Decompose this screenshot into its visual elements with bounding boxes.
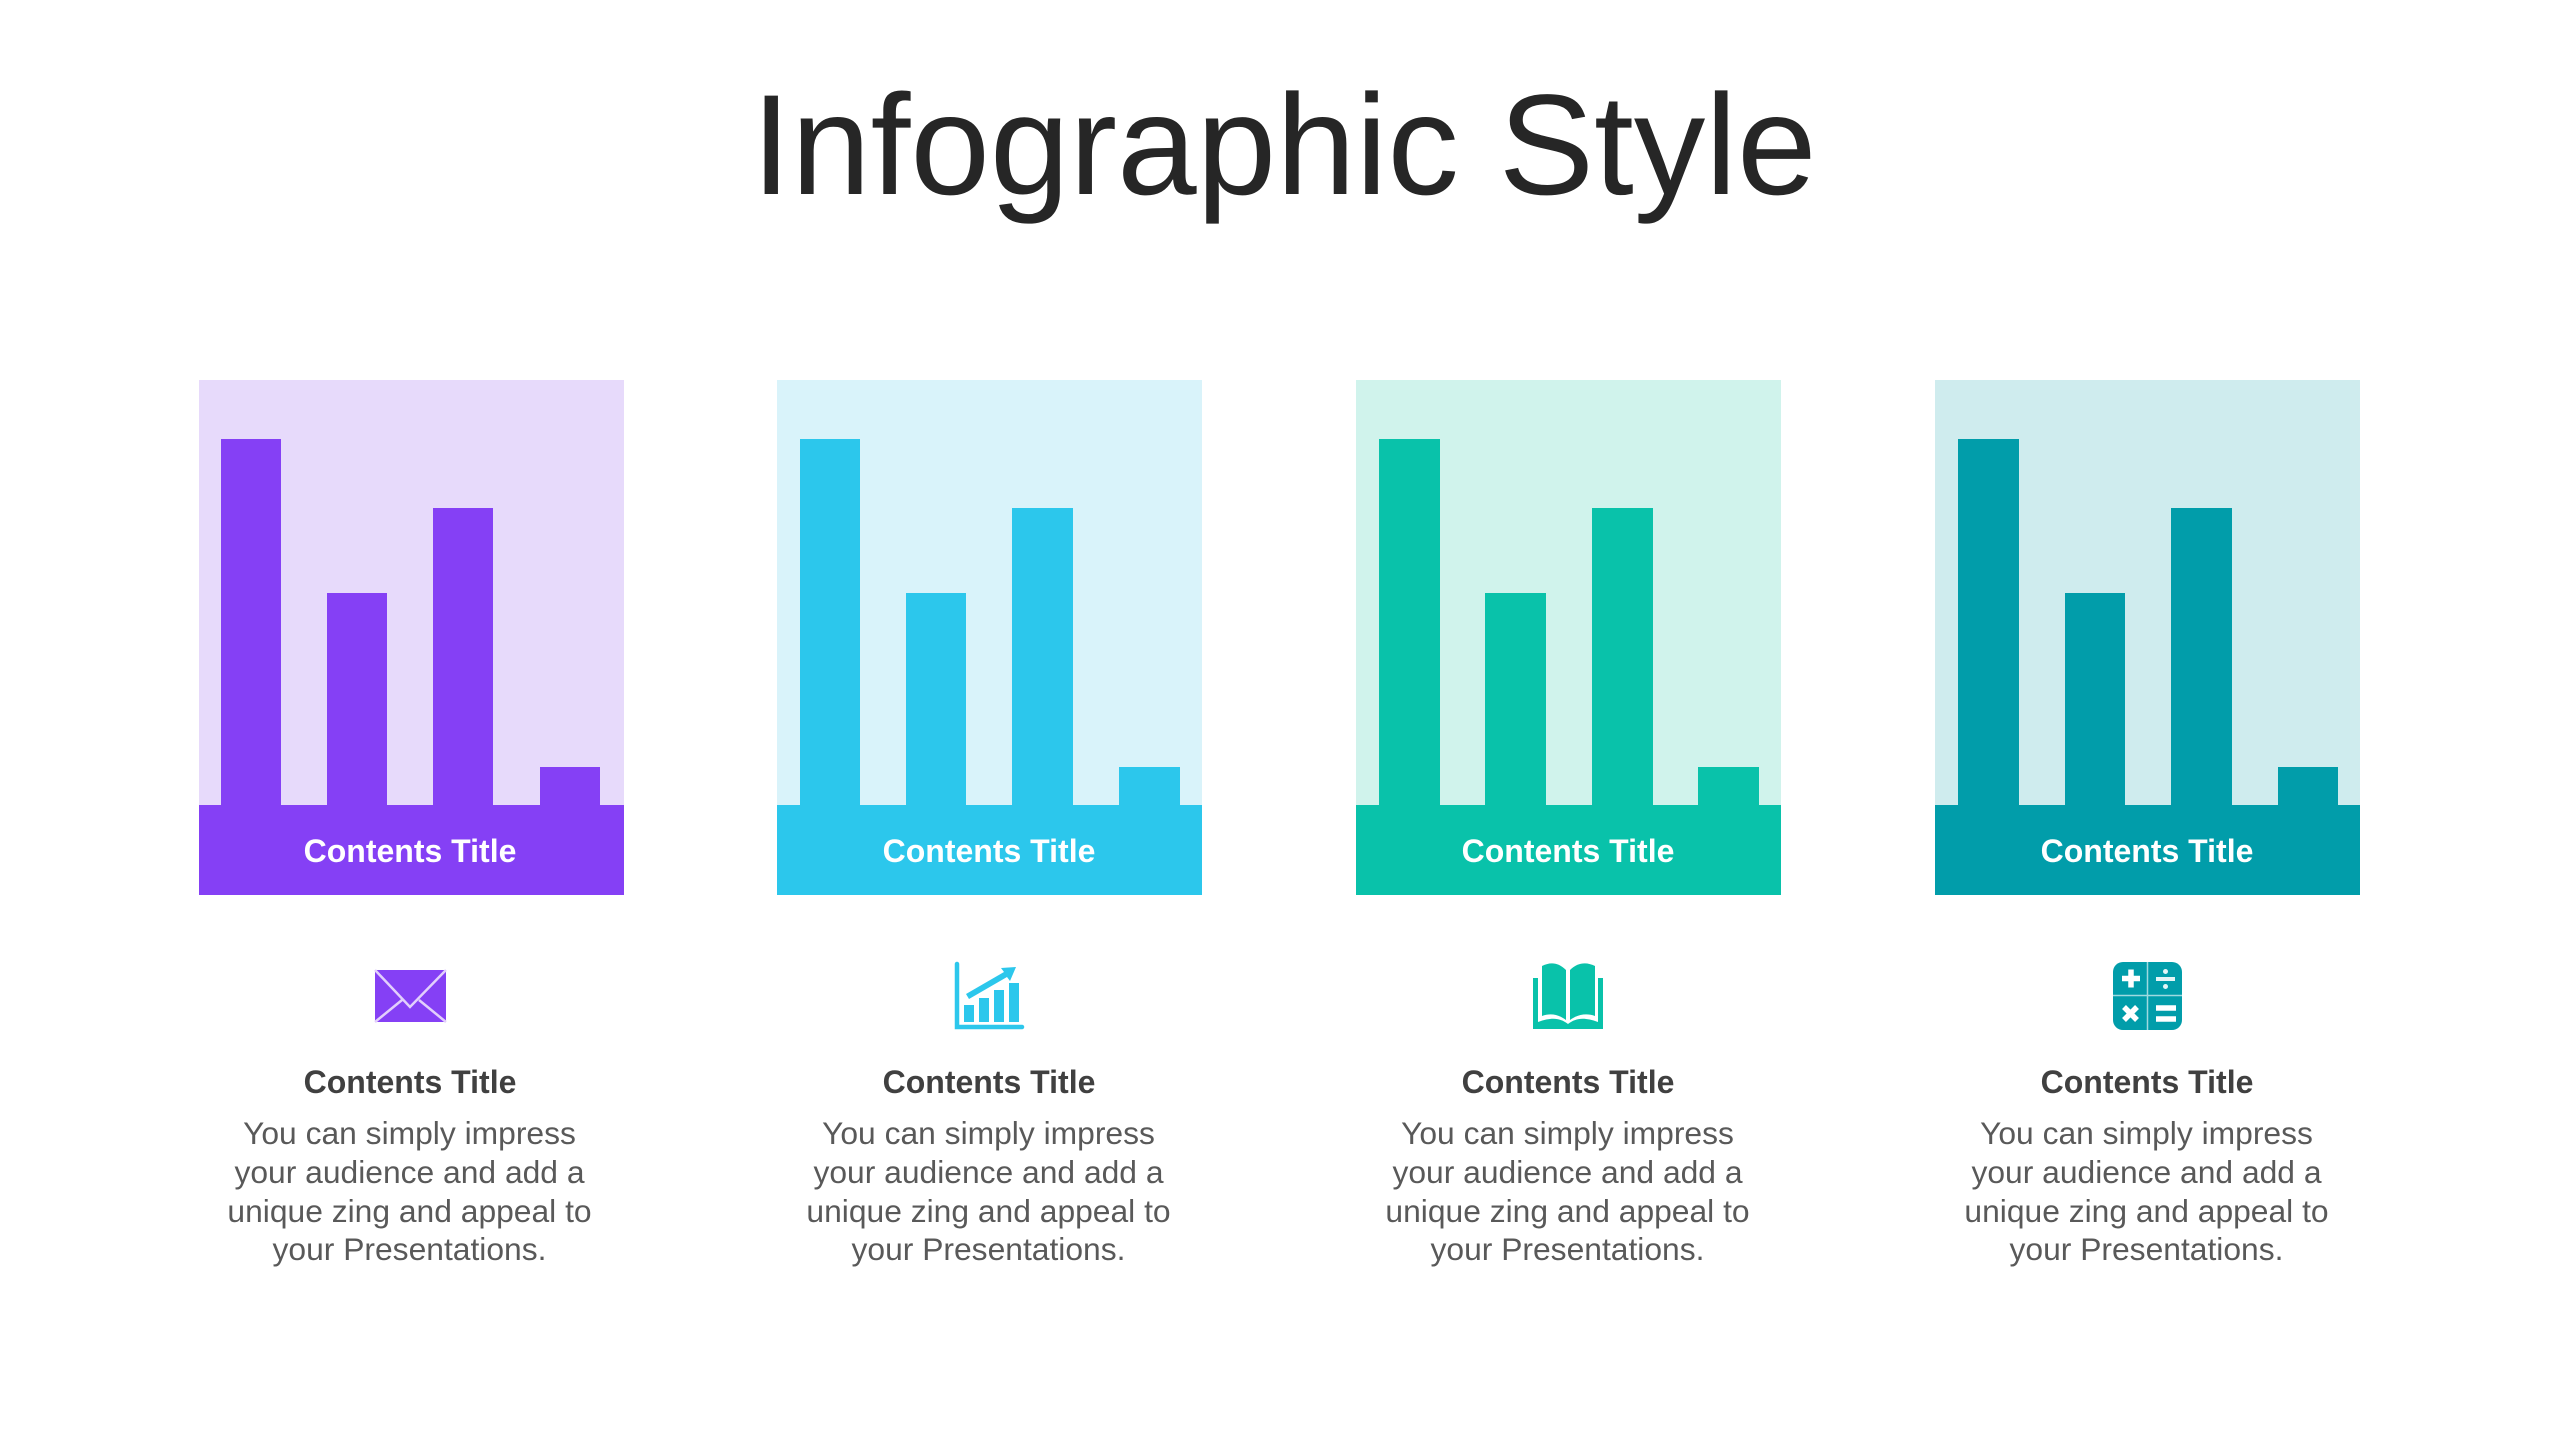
description: You can simply impress <box>243 1115 576 1151</box>
description: unique zing and appeal to <box>806 1193 1171 1229</box>
description <box>806 1115 1171 1267</box>
heading: Contents Title <box>304 1064 516 1100</box>
card title: Contents Title <box>1462 833 1674 869</box>
description: your Presentations. <box>1431 1231 1704 1267</box>
description: your Presentations. <box>852 1231 1125 1267</box>
card: cyan bar chart <box>777 380 1202 895</box>
card background <box>1356 380 1781 895</box>
panel: column 1 purple <box>199 380 624 1267</box>
card title: Contents Title <box>883 833 1095 869</box>
icon: envelope <box>375 970 446 1022</box>
card background <box>1935 380 2360 895</box>
bar chart <box>1935 439 2360 895</box>
card: purple bar chart <box>199 380 624 895</box>
heading: Contents Title <box>883 1064 1095 1100</box>
description: unique zing and appeal to <box>227 1193 592 1229</box>
description: You can simply impress <box>1980 1115 2313 1151</box>
description: your Presentations. <box>2010 1231 2283 1267</box>
description: You can simply impress <box>822 1115 1155 1151</box>
card background <box>777 380 1202 895</box>
description: your audience and add a <box>813 1154 1164 1190</box>
card title: Contents Title <box>304 833 516 869</box>
heading: Contents Title <box>2041 1064 2253 1100</box>
description <box>227 1115 592 1267</box>
card: green bar chart <box>1356 380 1781 895</box>
bar chart <box>777 439 1202 895</box>
title: Infographic Style <box>751 66 1817 225</box>
description: unique zing and appeal to <box>1964 1193 2329 1229</box>
heading: Contents Title <box>1462 1064 1674 1100</box>
description: your Presentations. <box>273 1231 546 1267</box>
icon: open book <box>1533 963 1603 1029</box>
description: your audience and add a <box>1971 1154 2322 1190</box>
card: teal bar chart <box>1935 380 2360 895</box>
description: You can simply impress <box>1401 1115 1734 1151</box>
description: your audience and add a <box>1392 1154 1743 1190</box>
panel: column 2 cyan <box>777 380 1202 1267</box>
bar chart <box>199 439 624 895</box>
description: your audience and add a <box>234 1154 585 1190</box>
icon: calculator <box>2113 962 2182 1030</box>
description <box>1964 1115 2329 1267</box>
bar chart <box>1356 439 1781 895</box>
icon: growth chart <box>957 964 1022 1027</box>
description: unique zing and appeal to <box>1385 1193 1750 1229</box>
panel: column 3 green <box>1356 380 1781 1267</box>
panel: column 4 teal <box>1935 380 2360 1267</box>
card background <box>199 380 624 895</box>
description <box>1385 1115 1750 1267</box>
card title: Contents Title <box>2041 833 2253 869</box>
